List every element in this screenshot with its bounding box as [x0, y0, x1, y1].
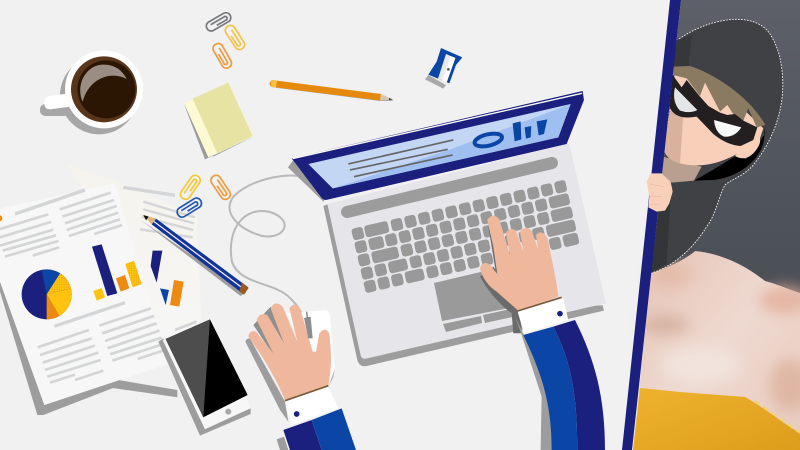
- hood and body: [651, 19, 783, 273]
- hand shadow: [245, 338, 288, 422]
- right eye: [714, 120, 741, 137]
- pink blanket: [633, 251, 800, 450]
- screen bezel: [292, 91, 584, 200]
- sticky note pad: [184, 83, 253, 159]
- hand shadow: [480, 267, 522, 333]
- back paper: [67, 164, 202, 397]
- coffee cup: [40, 50, 143, 134]
- thief: [651, 19, 783, 273]
- keyboard: [351, 180, 580, 293]
- wall: [651, 0, 800, 300]
- touch strip: [347, 163, 552, 212]
- left cuff and sleeve: [277, 386, 356, 450]
- neck: [662, 157, 702, 183]
- face: [664, 72, 763, 165]
- laptop screen: [308, 104, 571, 188]
- navy divider stripe: [622, 0, 681, 450]
- laptop base: [327, 143, 606, 359]
- mask: [669, 75, 757, 146]
- blue pencil: [140, 215, 249, 296]
- blanket folds: [641, 261, 800, 411]
- right hand: [480, 216, 558, 311]
- left hand and mouse: [245, 303, 335, 422]
- left cuff: [285, 387, 338, 425]
- paper clips top: [205, 11, 246, 70]
- orange marker dot: [0, 215, 2, 221]
- black scarf: [694, 126, 765, 181]
- ear: [735, 135, 760, 158]
- right photo panel: [622, 0, 800, 450]
- right cuff: [518, 298, 568, 333]
- hair: [673, 66, 765, 127]
- pie chart: [22, 269, 72, 319]
- sleeve shadow: [277, 437, 288, 450]
- yellow cloth: [633, 388, 800, 450]
- front paper: [0, 183, 168, 415]
- pencil sharpener: [425, 48, 462, 89]
- laptop: [288, 91, 606, 366]
- left hand: [248, 303, 331, 400]
- peeking hand: [647, 173, 673, 212]
- mouse: [287, 310, 335, 384]
- right arm and hand: [480, 216, 558, 333]
- laptop base shadow: [323, 203, 604, 366]
- right sleeve: [523, 327, 577, 450]
- bar chart: [92, 244, 142, 301]
- paper clips on paper: [175, 173, 232, 219]
- paper text lines: [0, 190, 165, 383]
- arm shadow: [515, 317, 552, 450]
- orange pencil: [270, 80, 394, 101]
- left sleeve: [283, 420, 322, 450]
- touchpad: [434, 265, 525, 332]
- back paper charts: [151, 251, 184, 307]
- mouse wheel: [304, 317, 313, 338]
- phone: [158, 318, 251, 436]
- screen hinge shadow: [288, 160, 327, 202]
- mouse cable: [230, 176, 304, 320]
- left eye: [674, 87, 697, 112]
